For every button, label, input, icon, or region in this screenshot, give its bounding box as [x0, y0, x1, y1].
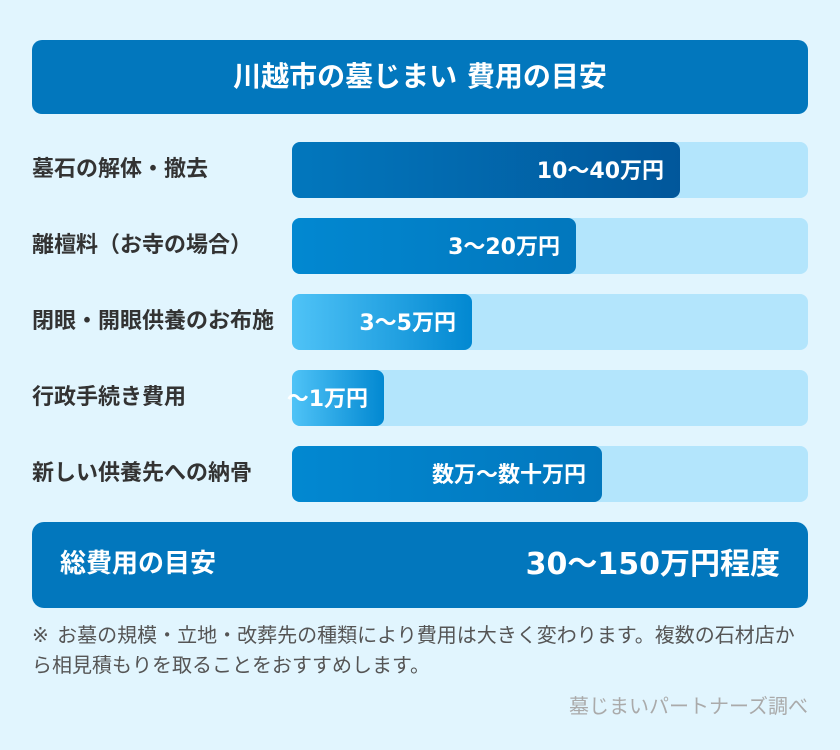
bar value: 数万〜数十万円: [292, 446, 602, 502]
total panel: [32, 522, 808, 608]
bar row: 墓石の解体・撤去: [292, 142, 808, 198]
bar value: 3〜5万円: 3〜5万円: [359, 311, 456, 336]
bar row: 行政手続き費用: [292, 370, 808, 426]
source: 墓じまいパートナーズ調べ: [569, 694, 808, 718]
bar row: 新しい供養先への納骨: [292, 446, 808, 502]
bar value: 〜1万円: [292, 370, 384, 426]
bar value: 数万〜数十万円: 数万〜数十万円: [432, 463, 586, 488]
label: 離檀料: 離檀料（お寺の場合）: [32, 233, 252, 258]
bar row: 離檀料: [292, 218, 808, 274]
footnote: ※ お墓の規模・立地・改葬先の種類により費用は大きく変わります。複数の石材店から相見積もりを取ることをおすすめします。: [32, 623, 795, 677]
title: 川越市の墓じまい 費用の目安: [233, 60, 607, 93]
title: [32, 40, 808, 114]
bar value: 10〜40万円: [292, 142, 680, 198]
label: 墓石の解体・撤去: 墓石の解体・撤去: [32, 157, 208, 182]
bar value: 3〜20万円: [292, 218, 576, 274]
bar value: 3〜5万円: [292, 294, 472, 350]
label: 新しい供養先への納骨: 新しい供養先への納骨: [32, 461, 252, 486]
bar value: 3〜20万円: 3〜20万円: [448, 235, 560, 260]
total label: 総費用の目安: [60, 549, 216, 579]
label: 閉眼・開眼供養のお布施: 閉眼・開眼供養のお布施: [32, 309, 274, 334]
label: 行政手続き費用: 行政手続き費用: [32, 385, 186, 410]
bar value: 〜1万円: 〜1万円: [287, 387, 368, 412]
bar row: 閉眼・開眼供養のお布施: [292, 294, 808, 350]
total value: 30〜150万円程度: [526, 547, 780, 582]
bar value: 10〜40万円: 10〜40万円: [537, 159, 664, 184]
